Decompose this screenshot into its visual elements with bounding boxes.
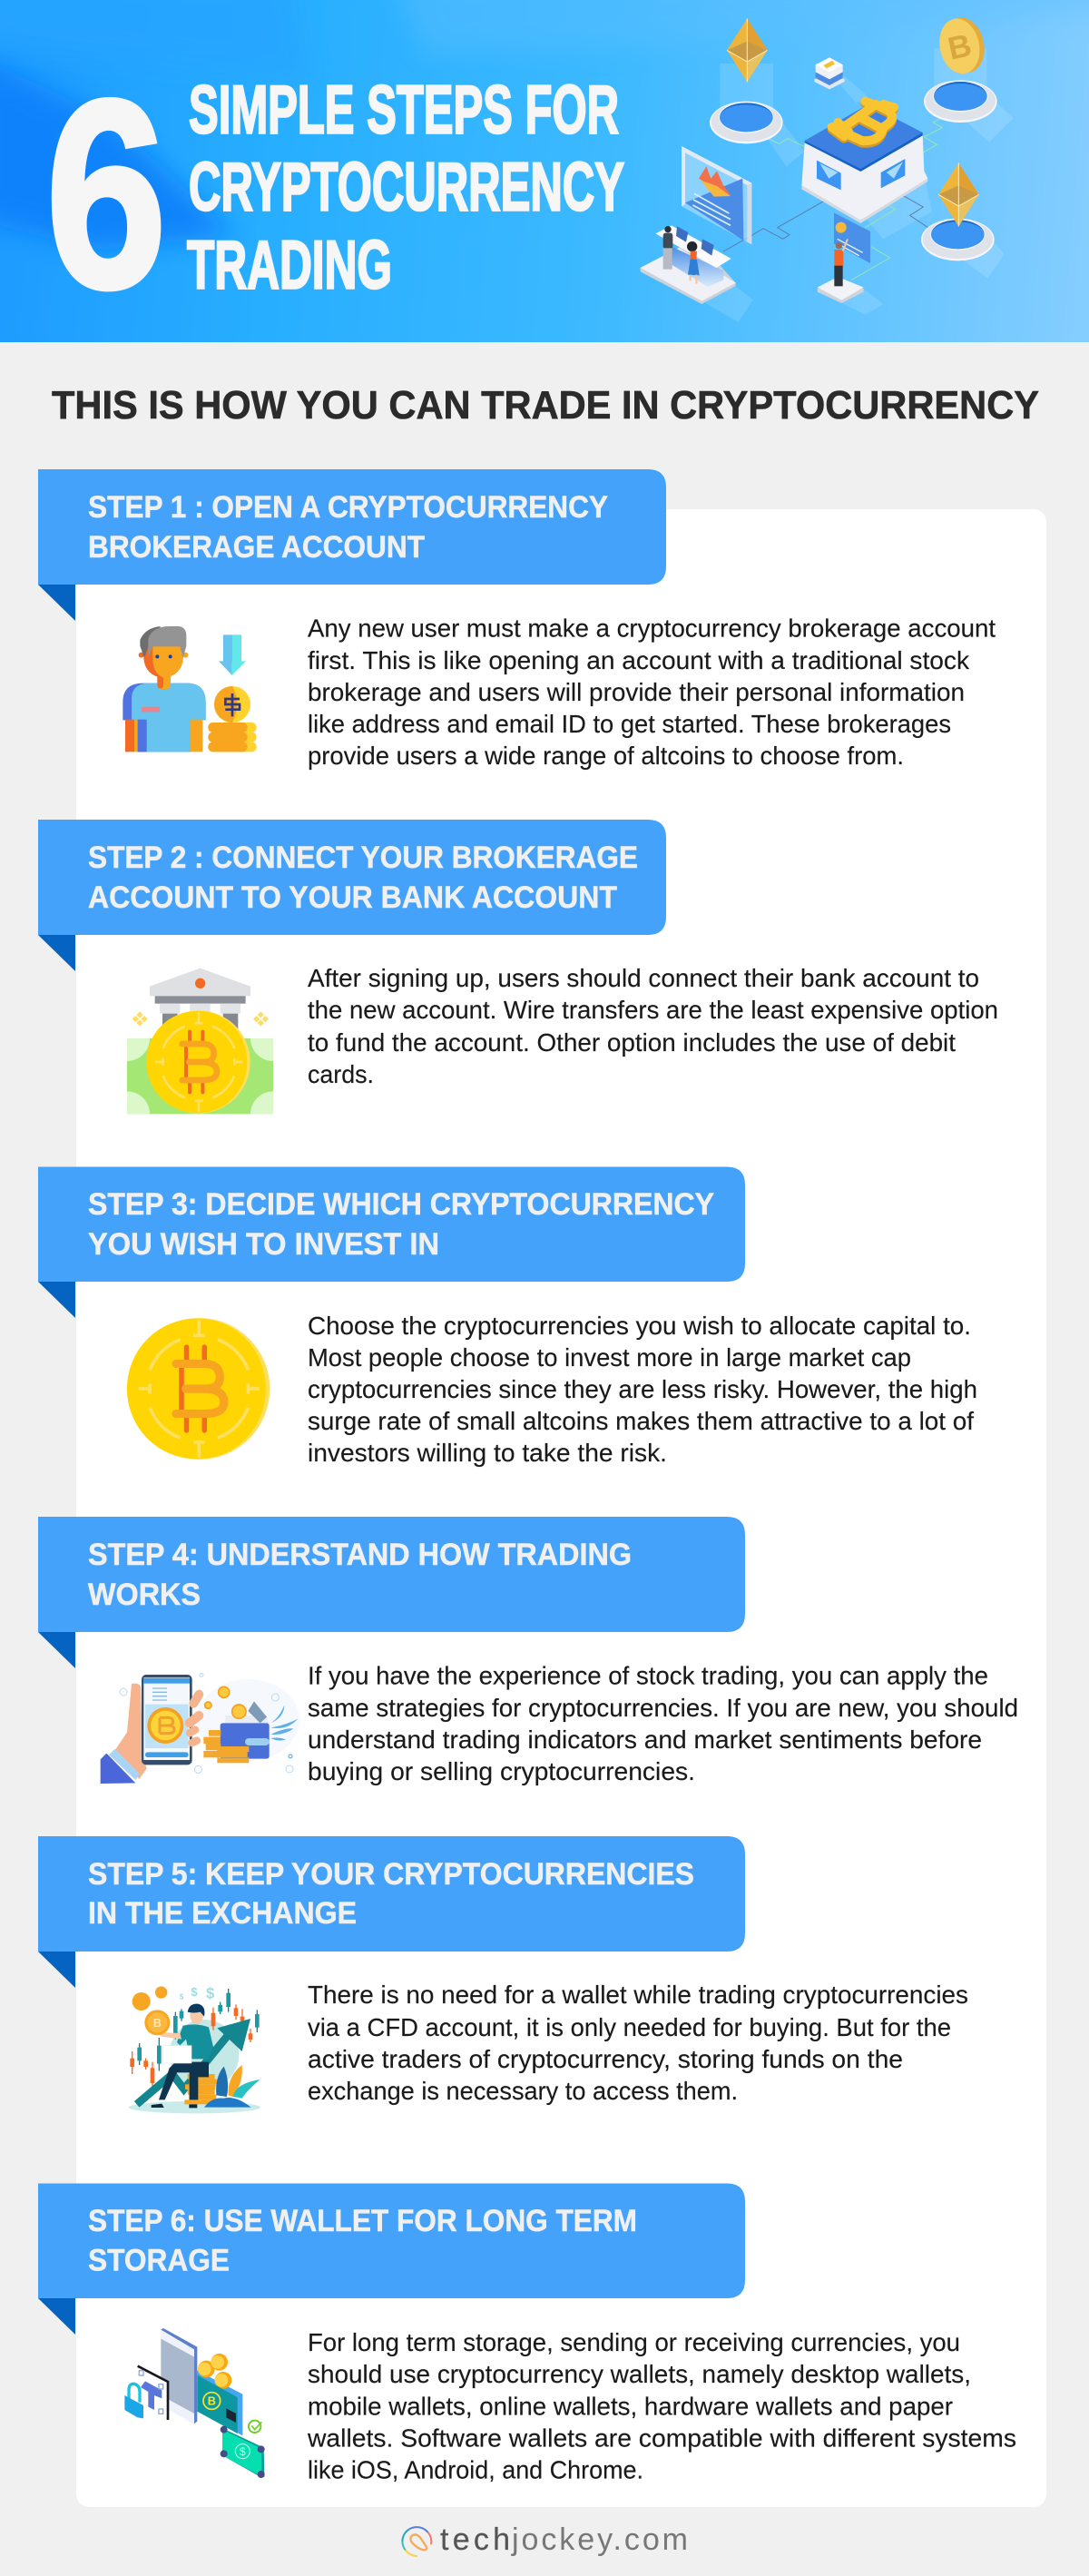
title: TRADING xyxy=(187,227,392,303)
title xyxy=(187,71,624,303)
step 3 description: cryptocurrencies since they are less risky. However, the high xyxy=(308,1375,977,1403)
step 6 ribbon fold xyxy=(38,2298,75,2335)
step 4 ribbon fold xyxy=(38,1632,75,1668)
icon: phone and wallet xyxy=(101,1673,299,1784)
icon: bitcoin coin xyxy=(127,1318,270,1460)
step 1 heading: STEP 1 : OPEN A CRYPTOCURRENCY xyxy=(88,490,608,525)
icon: wallets: $ xyxy=(240,2445,246,2458)
icon: trader on coins: $ xyxy=(191,1985,198,1999)
header banner xyxy=(0,0,1089,344)
step 2 description: the new account. Wire transfers are the least expensive option xyxy=(308,996,998,1024)
step 4 description: understand trading indicators and market sentiments before xyxy=(308,1726,982,1754)
wordmark: tech xyxy=(440,2522,510,2557)
icon: wallets: B xyxy=(208,2395,216,2408)
step 1 heading xyxy=(88,490,608,565)
icon: user with coins xyxy=(123,626,257,752)
step 3 description xyxy=(308,1312,977,1467)
step 2 xyxy=(38,820,998,1114)
step 2 ribbon fold xyxy=(38,935,75,971)
step 6 description xyxy=(307,2328,1016,2483)
step 2 description: to fund the account. Other option includes the use of debit xyxy=(308,1028,956,1057)
step 4 description: same strategies for cryptocurrencies. If you are new, you should xyxy=(308,1694,1018,1722)
step 3 description: surge rate of small altcoins makes them attractive to a lot of xyxy=(308,1407,974,1435)
icon: bank with bitcoin xyxy=(127,968,273,1114)
icon: wallets xyxy=(124,2328,265,2478)
title: SIMPLE STEPS FOR xyxy=(189,71,619,147)
hero illustration: crypto network xyxy=(641,14,1014,322)
step 1 description: Any new user must make a cryptocurrency brokerage account xyxy=(308,614,996,643)
step 3 heading xyxy=(88,1187,714,1262)
step 5 description: There is no need for a wallet while trading cryptocurrencies xyxy=(308,1981,968,2009)
step 5 banner xyxy=(38,1836,745,1952)
step 4 heading: WORKS xyxy=(88,1578,201,1612)
step 6 heading: STORAGE xyxy=(88,2244,230,2278)
footer logo xyxy=(402,2522,688,2557)
step 5 description xyxy=(308,1981,968,2105)
step 4 xyxy=(38,1517,1018,1785)
step 4 heading xyxy=(88,1538,632,1612)
step 4 banner xyxy=(38,1517,745,1632)
step 1 xyxy=(38,469,996,770)
step 2 heading: ACCOUNT TO YOUR BANK ACCOUNT xyxy=(88,880,617,915)
step 4 description xyxy=(308,1661,1018,1785)
panel: steps card xyxy=(76,509,1046,2507)
step 1 ribbon fold xyxy=(38,585,75,621)
icon: trader on coins xyxy=(129,1985,260,2113)
step 4 heading: STEP 4: UNDERSTAND HOW TRADING xyxy=(88,1538,632,1572)
step 1 heading: BROKERAGE ACCOUNT xyxy=(88,530,425,565)
step 3 description: Choose the cryptocurrencies you wish to allocate capital to. xyxy=(308,1312,971,1340)
step 2 heading xyxy=(88,841,638,915)
step 6 heading xyxy=(88,2204,637,2278)
step 2 description: cards. xyxy=(308,1060,374,1088)
step 1 description xyxy=(308,614,996,770)
step 6 description: like iOS, Android, and Chrome. xyxy=(308,2456,643,2483)
section heading: THIS IS HOW YOU CAN TRADE IN CRYPTOCURRENCY xyxy=(52,383,1039,428)
step 5 heading xyxy=(88,1857,694,1931)
hero illustration: crypto network: B xyxy=(945,27,975,67)
step 6 banner xyxy=(38,2184,745,2298)
step 3 ribbon fold xyxy=(38,1282,75,1318)
icon: trader on coins: B xyxy=(153,2017,162,2030)
step 3 description: Most people choose to invest more in large market cap xyxy=(308,1343,911,1372)
step 2 heading: STEP 2 : CONNECT YOUR BROKERAGE xyxy=(88,841,638,875)
step 2 banner xyxy=(38,820,666,935)
step 4 description: buying or selling cryptocurrencies. xyxy=(308,1757,695,1785)
step 3 description: investors willing to take the risk. xyxy=(308,1439,667,1467)
big number six: 6 xyxy=(45,44,167,344)
step 6 xyxy=(38,2184,1016,2483)
step 5 heading: STEP 5: KEEP YOUR CRYPTOCURRENCIES xyxy=(88,1857,694,1892)
icon: trader on coins: $ xyxy=(180,1992,184,2001)
step 1 description: first. This is like opening an account with a traditional stock xyxy=(308,646,970,674)
step 6 description: should use cryptocurrency wallets, namely desktop wallets, xyxy=(308,2360,971,2388)
step 2 description: After signing up, users should connect their bank account to xyxy=(308,964,979,992)
step 5 xyxy=(38,1836,968,2113)
footer logo: jockey.com xyxy=(511,2522,688,2557)
step 6 heading: STEP 6: USE WALLET FOR LONG TERM xyxy=(88,2204,637,2238)
step 2 description xyxy=(308,964,998,1088)
step 3 heading: STEP 3: DECIDE WHICH CRYPTOCURRENCY xyxy=(88,1187,714,1222)
step 1 description: like address and email ID to get started. These brokerages xyxy=(308,710,951,738)
step 4 description: If you have the experience of stock trading, you can apply the xyxy=(308,1661,988,1690)
step 5 description: active traders of cryptocurrency, storing funds on the xyxy=(308,2045,903,2073)
step 1 description: brokerage and users will provide their personal information xyxy=(308,678,965,706)
step 1 description: provide users a wide range of altcoins to choose from. xyxy=(308,742,904,770)
title: CRYPTOCURRENCY xyxy=(189,149,624,225)
step 5 description: via a CFD account, it is only needed for buying. But for the xyxy=(308,2013,951,2041)
icon: trader on coins: $ xyxy=(206,1985,215,2002)
step 1 banner xyxy=(38,469,666,585)
step 3 banner xyxy=(38,1167,745,1282)
step 5 ribbon fold xyxy=(38,1952,75,1988)
step 6 description: wallets. Software wallets are compatible with different systems xyxy=(307,2424,1016,2453)
step 6 description: For long term storage, sending or receiving currencies, you xyxy=(308,2328,960,2356)
icon: techjockey mark xyxy=(402,2527,431,2556)
step 3 heading: YOU WISH TO INVEST IN xyxy=(88,1227,439,1262)
step 5 description: exchange is necessary to access them. xyxy=(308,2077,738,2105)
step 5 heading: IN THE EXCHANGE xyxy=(88,1896,357,1931)
step 6 description: mobile wallets, online wallets, hardware wallets and paper xyxy=(308,2393,953,2420)
step 3 xyxy=(38,1167,977,1467)
